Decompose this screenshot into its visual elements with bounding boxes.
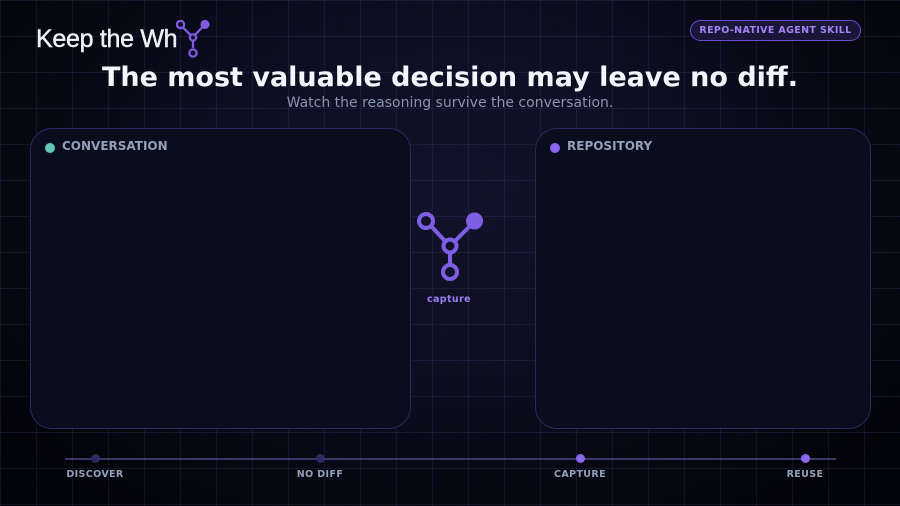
timeline node: discover [91,454,100,463]
timeline node: capture [576,454,585,463]
panel: repository [535,128,871,429]
subtitle: Watch the reasoning survive the conversation. [287,95,613,111]
panel: conversation [30,128,411,429]
badge: repo-native agent skill [690,20,861,41]
label: capture: capture [427,294,471,305]
title: The most valuable decision may leave no diff. [102,62,798,93]
badge: repo-native agent skill: REPO-NATIVE AGENT SKILL [699,25,852,36]
timeline track [65,458,836,460]
timeline label: no diff: NO DIFF [297,469,343,480]
timeline label: discover: DISCOVER [66,469,124,480]
timeline node: no diff [316,454,325,463]
logo wordmark [36,20,210,58]
logo icon: Y branch [176,20,210,58]
icon: central capture Y branch [417,212,483,281]
icon: conversation status dot [45,143,55,153]
icon: repository status dot [550,143,560,153]
timeline node: reuse [801,454,810,463]
heading: repository: REPOSITORY [567,139,652,153]
timeline [65,458,836,460]
timeline label: reuse: REUSE [787,469,823,480]
logo text: Keep the Wh [36,25,177,53]
timeline label: capture: CAPTURE [554,469,606,480]
heading: conversation: CONVERSATION [62,139,168,153]
